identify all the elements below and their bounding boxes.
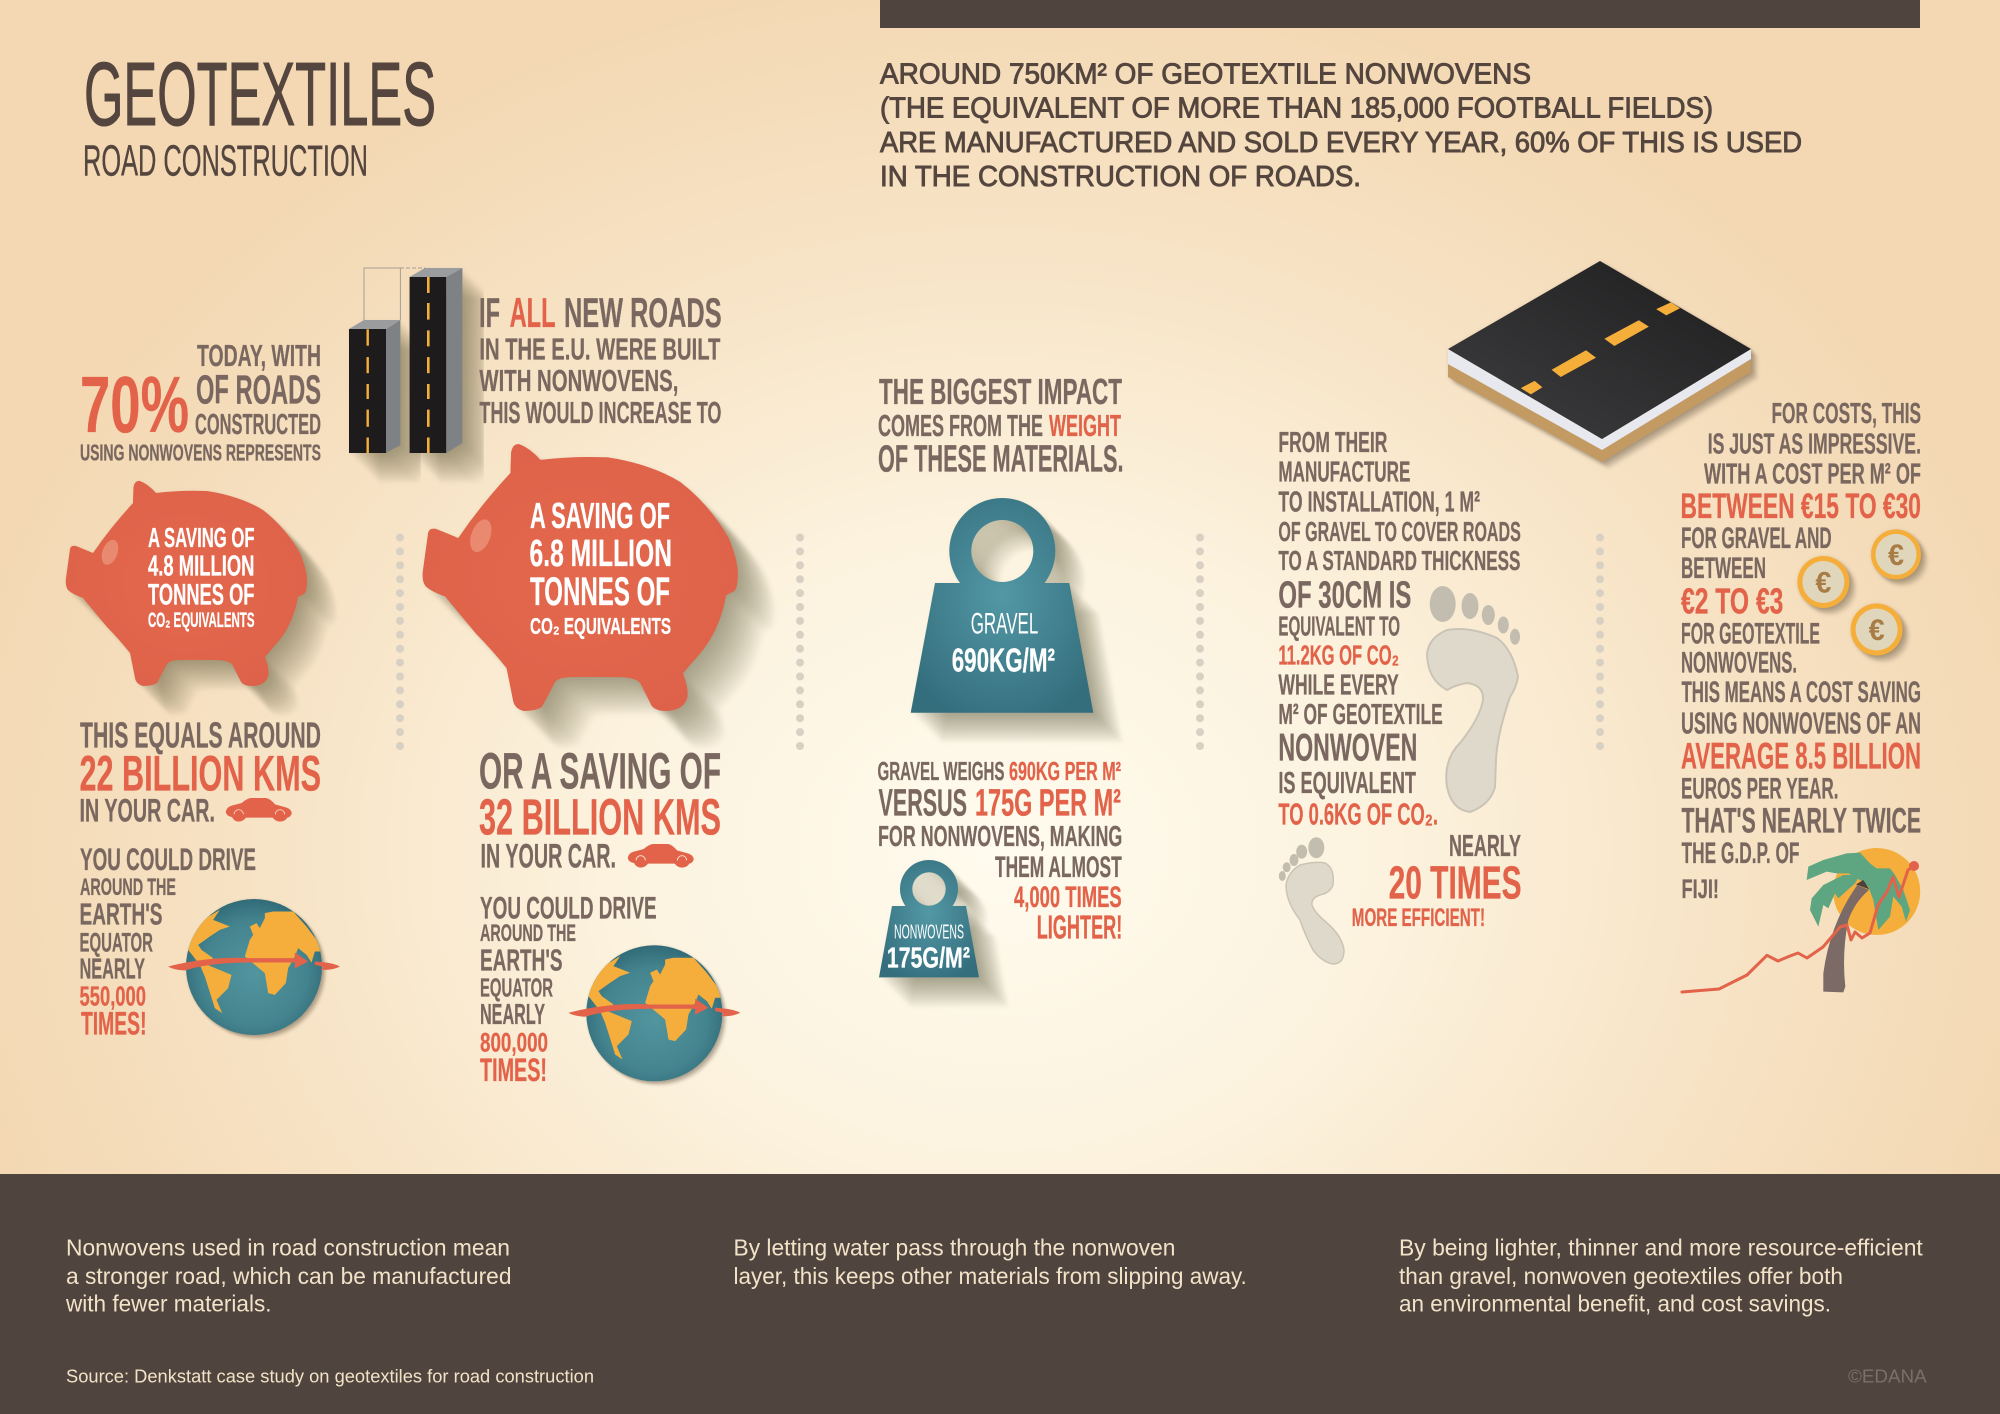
text: weight comparison bbox=[878, 756, 1122, 946]
icon: large piggy bank with saving: A SAVING OF bbox=[530, 495, 670, 536]
text: 22 billion kms: IN YOUR CAR. bbox=[80, 793, 215, 829]
footer text: resource efficient: By being lighter, thinner and more resource-efficient bbox=[1399, 1235, 1923, 1261]
footer text: water pass: By letting water pass through the nonwoven bbox=[734, 1235, 1175, 1261]
intro text: IN THE CONSTRUCTION OF ROADS. bbox=[880, 161, 1361, 193]
text: you could drive: EARTH'S bbox=[480, 944, 562, 978]
text: co2 comparison: M² OF GEOTEXTILE bbox=[1278, 699, 1443, 731]
icon: euro coin: € bbox=[1815, 567, 1832, 600]
heading: if all new roads: THIS WOULD INCREASE TO bbox=[479, 395, 721, 430]
text: cost comparison: €2 TO €3 bbox=[1681, 580, 1783, 622]
text: you could drive: YOU COULD DRIVE bbox=[480, 889, 657, 925]
heading: biggest impact: COMES FROM THE bbox=[878, 409, 1043, 443]
text: you could drive: YOU COULD DRIVE bbox=[80, 841, 256, 877]
text: cost comparison: FIJI! bbox=[1682, 874, 1719, 904]
icon: euro coin: € bbox=[1869, 614, 1885, 647]
text: weight comparison: 4,000 TIMES bbox=[1014, 881, 1122, 914]
text: you could drive: AROUND THE bbox=[480, 920, 576, 947]
text: weight comparison: LIGHTER! bbox=[1037, 909, 1122, 946]
icon: small piggy bank with saving: CO₂ EQUIVALENTS bbox=[148, 609, 254, 632]
icon: small piggy bank with saving: A SAVING OF bbox=[148, 522, 254, 553]
icon: euro coin bbox=[1871, 529, 1921, 579]
icon: nonwovens weight: 175G/M² bbox=[887, 942, 970, 974]
icon: small piggy bank with saving: TONNES OF bbox=[148, 579, 254, 612]
text: 22 billion kms: THIS EQUALS AROUND bbox=[80, 714, 321, 755]
footer text: water pass: layer, this keeps other materials from slipping away. bbox=[734, 1263, 1247, 1289]
text: you could drive: AROUND THE bbox=[80, 874, 176, 901]
text: you could drive: NEARLY bbox=[80, 953, 145, 985]
text: co2 comparison: MORE EFFICIENT! bbox=[1352, 904, 1485, 932]
source: Source: Denkstatt case study on geotextiles for road construction bbox=[66, 1367, 594, 1387]
icon: car bbox=[628, 844, 694, 868]
text: cost comparison: THE G.D.P. OF bbox=[1682, 837, 1800, 870]
intro text bbox=[880, 58, 1802, 193]
text: co2 comparison: OF GRAVEL TO COVER ROADS bbox=[1278, 516, 1521, 547]
divider bbox=[796, 534, 804, 750]
copyright: ©EDANA bbox=[1848, 1367, 1927, 1387]
icon: small piggy bank with saving: 4.8 MILLION bbox=[148, 551, 254, 583]
icon: large piggy bank with saving: CO₂ EQUIVALENTS bbox=[530, 613, 671, 639]
footer text: resource efficient: than gravel, nonwoven geotextiles offer both bbox=[1399, 1263, 1843, 1289]
title bbox=[83, 45, 436, 186]
divider bbox=[1196, 534, 1204, 750]
text: 32 billion kms bbox=[479, 742, 721, 875]
text: you could drive bbox=[480, 889, 657, 1088]
icon: palm tree and sun bbox=[1807, 848, 1920, 992]
text: weight comparison: 690KG PER M² bbox=[1009, 756, 1121, 786]
text: co2 comparison: OF 30CM IS bbox=[1278, 575, 1411, 617]
footer text: stronger road: a stronger road, which can be manufactured bbox=[66, 1263, 512, 1289]
heading: biggest impact: WEIGHT bbox=[1049, 409, 1121, 443]
text: you could drive: TIMES! bbox=[81, 1005, 146, 1041]
text: cost comparison: FOR GRAVEL AND bbox=[1681, 522, 1832, 555]
panel: carbon footprint bbox=[1278, 427, 1522, 964]
text: weight comparison: GRAVEL WEIGHS bbox=[878, 756, 1004, 786]
footer text: stronger road bbox=[65, 1235, 512, 1317]
text: co2 comparison: 20 TIMES bbox=[1389, 857, 1522, 909]
heading: today with 70%: TODAY, WITH bbox=[197, 338, 321, 373]
intro text: ARE MANUFACTURED AND SOLD EVERY YEAR, 60% OF THIS IS USED bbox=[880, 127, 1802, 159]
heading: today with 70%: CONSTRUCTED bbox=[195, 409, 321, 441]
text: 22 billion kms bbox=[80, 714, 321, 829]
divider bbox=[1596, 534, 1604, 750]
heading: today with 70%: USING NONWOVENS REPRESENTS bbox=[80, 440, 321, 466]
icon: euro coin bbox=[1851, 604, 1903, 656]
icon: nonwovens weight bbox=[879, 860, 979, 977]
chart: rising line bbox=[1682, 861, 1919, 992]
text: weight comparison: 175G PER M² bbox=[975, 782, 1121, 824]
icon: gravel weight bbox=[911, 498, 1093, 713]
text: co2 comparison: FROM THEIR bbox=[1278, 427, 1387, 459]
icon: large footprint bbox=[1427, 586, 1520, 812]
text: co2 comparison: TO 0.6KG OF CO₂. bbox=[1278, 796, 1438, 831]
text: weight comparison: VERSUS bbox=[878, 782, 967, 824]
heading: if all new roads: NEW ROADS bbox=[564, 289, 722, 336]
icon: euro coin: € bbox=[1888, 539, 1904, 572]
icon: globe bbox=[168, 899, 340, 1035]
text: co2 comparison: IS EQUIVALENT bbox=[1278, 765, 1416, 800]
footer text: resource efficient: an environmental benefit, and cost savings. bbox=[1399, 1291, 1831, 1317]
text: co2 comparison: TO INSTALLATION, 1 M² bbox=[1278, 487, 1480, 519]
footer band bbox=[0, 1174, 2000, 1414]
footer text: stronger road: Nonwovens used in road construction mean bbox=[66, 1235, 510, 1261]
panel: costs bbox=[1680, 398, 1921, 992]
panel: weight bbox=[878, 371, 1124, 977]
intro text: (THE EQUIVALENT OF MORE THAN 185,000 FOOTBALL FIELDS) bbox=[880, 92, 1713, 124]
heading: if all new roads: IN THE E.U. WERE BUILT bbox=[479, 332, 720, 367]
text: 32 billion kms: OR A SAVING OF bbox=[479, 742, 721, 799]
text: cost comparison: EUROS PER YEAR. bbox=[1681, 773, 1838, 806]
icon: small piggy bank with saving bbox=[66, 481, 307, 686]
text: weight comparison: THEM ALMOST bbox=[995, 851, 1122, 884]
icon: road columns bbox=[349, 268, 462, 453]
heading: today with 70% bbox=[80, 338, 321, 466]
text: 22 billion kms: 22 BILLION KMS bbox=[80, 746, 321, 802]
footer text: stronger road: with fewer materials. bbox=[65, 1291, 272, 1317]
icon: globe bbox=[568, 945, 740, 1081]
heading: if all new roads: ALL bbox=[510, 289, 556, 336]
text: you could drive bbox=[80, 841, 256, 1041]
panel: if all new roads bbox=[349, 268, 740, 1088]
icon: road slab bbox=[1448, 261, 1751, 462]
panel: today's savings bbox=[66, 338, 340, 1041]
heading: biggest impact: THE BIGGEST IMPACT bbox=[879, 371, 1122, 412]
text: cost comparison: NONWOVENS. bbox=[1681, 647, 1797, 680]
icon: gravel weight: GRAVEL bbox=[971, 608, 1038, 641]
text: you could drive: NEARLY bbox=[480, 999, 545, 1031]
footer text: water pass bbox=[734, 1235, 1247, 1289]
heading: biggest impact: OF THESE MATERIALS. bbox=[878, 438, 1124, 480]
icon: large piggy bank with saving bbox=[423, 444, 738, 711]
heading: biggest impact bbox=[878, 371, 1124, 480]
text: 32 billion kms: 32 BILLION KMS bbox=[479, 788, 721, 845]
text: 32 billion kms: IN YOUR CAR. bbox=[480, 837, 616, 875]
text: co2 comparison: NEARLY bbox=[1449, 828, 1521, 863]
heading: if all new roads: IF bbox=[479, 289, 500, 336]
top bar bbox=[880, 0, 1920, 28]
text: you could drive: EQUATOR bbox=[80, 928, 153, 958]
text: co2 comparison: 11.2KG OF CO₂ bbox=[1278, 639, 1399, 670]
text: co2 comparison: EQUIVALENT TO bbox=[1278, 610, 1400, 641]
text: co2 comparison: WHILE EVERY bbox=[1278, 670, 1399, 702]
footer text: resource efficient bbox=[1399, 1235, 1923, 1317]
title: GEOTEXTILES bbox=[84, 45, 436, 145]
icon: gravel weight: 690KG/M² bbox=[952, 642, 1055, 678]
heading: today with 70%: OF ROADS bbox=[196, 367, 321, 413]
divider bbox=[396, 534, 404, 750]
heading: if all new roads bbox=[479, 289, 722, 430]
heading: today with 70%: 70% bbox=[80, 360, 189, 449]
icon: car bbox=[226, 798, 292, 822]
text: co2 comparison bbox=[1278, 427, 1522, 932]
text: co2 comparison: MANUFACTURE bbox=[1278, 457, 1410, 489]
text: you could drive: EARTH'S bbox=[80, 897, 162, 931]
title: ROAD CONSTRUCTION bbox=[83, 137, 368, 186]
text: weight comparison: FOR NONWOVENS, MAKING bbox=[878, 821, 1122, 853]
icon: nonwovens weight: NONWOVENS bbox=[894, 922, 964, 944]
text: you could drive: EQUATOR bbox=[480, 973, 553, 1003]
text: cost comparison: FOR GEOTEXTILE bbox=[1681, 618, 1820, 651]
text: you could drive: 550,000 bbox=[80, 981, 146, 1012]
icon: large piggy bank with saving: 6.8 MILLION bbox=[530, 533, 672, 575]
heading: if all new roads: WITH NONWOVENS, bbox=[479, 363, 678, 398]
text: co2 comparison: TO A STANDARD THICKNESS bbox=[1278, 545, 1520, 576]
intro text: AROUND 750KM² OF GEOTEXTILE NONWOVENS bbox=[880, 58, 1531, 90]
text: you could drive: TIMES! bbox=[480, 1052, 547, 1088]
text: you could drive: 800,000 bbox=[480, 1028, 548, 1058]
icon: euro coin bbox=[1797, 556, 1849, 608]
text: co2 comparison: NONWOVEN bbox=[1278, 726, 1417, 769]
text: cost comparison bbox=[1680, 398, 1921, 904]
text: cost comparison: BETWEEN bbox=[1681, 552, 1766, 585]
icon: large piggy bank with saving: TONNES OF bbox=[530, 570, 670, 614]
icon: small footprint bbox=[1279, 837, 1344, 964]
